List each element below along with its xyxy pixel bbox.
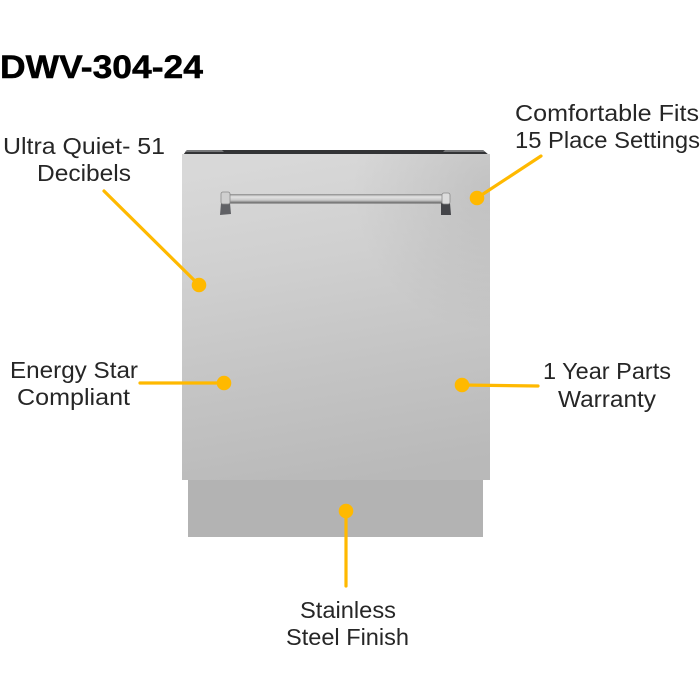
title: DWV-304-24	[0, 49, 203, 85]
callout: comfortable fits	[470, 100, 700, 205]
callout: stainless steel	[286, 504, 409, 650]
dishwasher toe kick	[188, 480, 483, 537]
callout dot	[339, 504, 353, 518]
callout dot	[217, 376, 231, 390]
callout dot	[470, 191, 484, 205]
callout dot	[455, 378, 469, 392]
callout dot	[192, 278, 206, 292]
callout line	[477, 156, 541, 198]
callout line	[462, 385, 538, 386]
door handle	[220, 192, 451, 215]
callout: warranty	[455, 358, 671, 412]
dishwasher top edge	[183, 150, 489, 155]
callout text: Comfortable Fits	[515, 100, 699, 126]
callout text: 1 Year Parts	[543, 358, 671, 384]
callout text: Steel Finish	[286, 624, 409, 650]
callout line	[104, 191, 199, 285]
callout: energy star	[10, 357, 231, 410]
callout text: Energy Star	[10, 357, 138, 383]
callout text: Warranty	[558, 386, 656, 412]
dishwasher door panel	[182, 154, 490, 480]
callout line	[344, 511, 348, 586]
dishwasher illustration	[182, 150, 490, 537]
callout text: Stainless	[300, 597, 396, 623]
callout text: Decibels	[37, 160, 131, 186]
callout: ultra quiet	[3, 133, 206, 292]
callout text: Ultra Quiet- 51	[3, 133, 165, 159]
callout text: 15 Place Settings	[515, 127, 700, 153]
callout text: Compliant	[17, 384, 131, 410]
callout line	[140, 381, 224, 385]
